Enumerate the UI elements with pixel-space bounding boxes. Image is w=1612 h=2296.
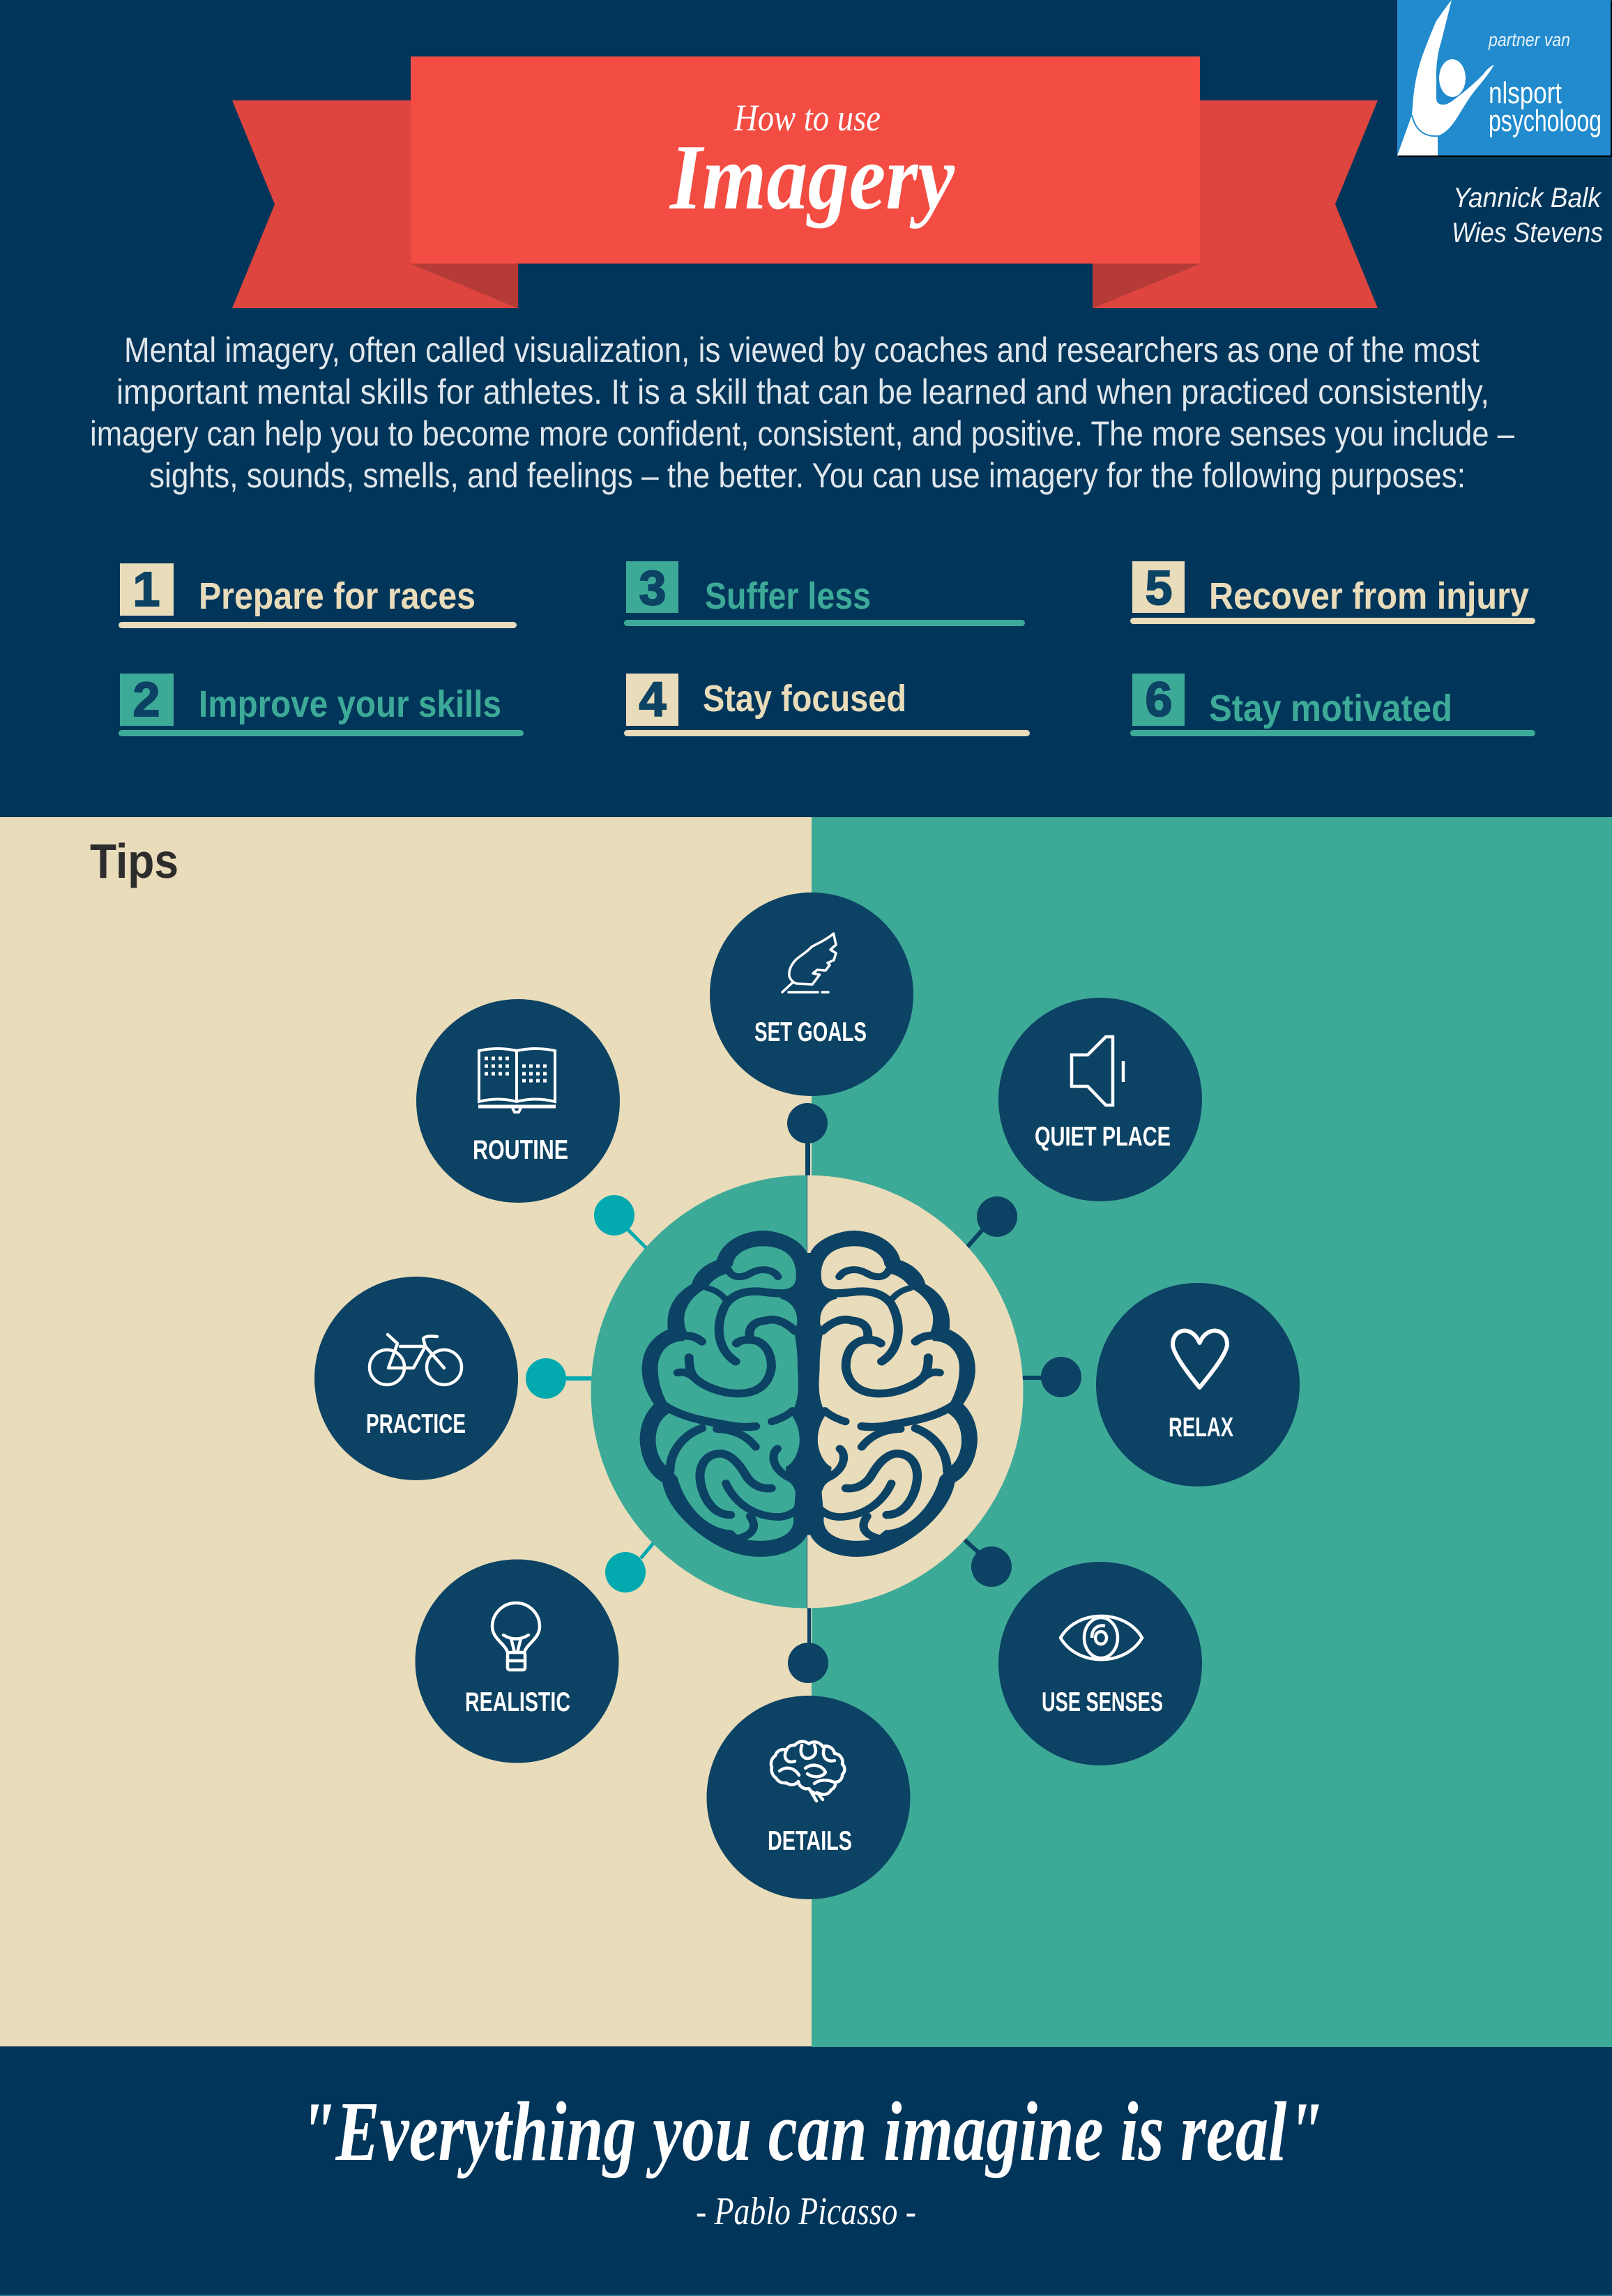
connector: relax (1021, 1357, 1081, 1397)
item 2: 2 (133, 672, 160, 727)
connector: details (788, 1606, 828, 1683)
purposes list (119, 561, 1535, 736)
item 2: Improve your skills (199, 683, 501, 725)
tips panel background right (812, 817, 1612, 2047)
tip: realistic (416, 1559, 619, 1763)
logo word nlsport: nlsport (1489, 76, 1562, 110)
subtitle: How to use (733, 97, 881, 139)
intro paragraph: important mental skills for athletes. It is a skill that can be learned and when practiced consistently, (116, 372, 1489, 411)
item 1: Prepare for races (199, 575, 476, 617)
logo: nlsport psycholoog (1397, 0, 1612, 157)
tip: quiet place (998, 998, 1202, 1201)
logo figure (1397, 0, 1494, 155)
item 5: Recover from injury (1209, 575, 1529, 617)
connector: set goals (787, 1103, 828, 1177)
icon: feather quill (782, 934, 836, 992)
item 6: Stay motivated (1209, 687, 1452, 729)
icon: bicycle (370, 1335, 462, 1385)
icon: open book (478, 1049, 556, 1112)
ribbon right tail (1093, 100, 1378, 308)
connectors and dots (526, 1103, 1081, 1683)
logo caption: partner van (1488, 29, 1570, 50)
item 1 (119, 562, 517, 628)
brain left hemisphere (640, 1231, 809, 1557)
icon: heart (1173, 1331, 1227, 1388)
tip: routine (416, 999, 620, 1203)
label: PRACTICE (366, 1409, 466, 1439)
icon: light bulb (492, 1603, 540, 1670)
logo figure contour (1412, 115, 1438, 136)
item 3: Suffer less (705, 575, 871, 617)
connector: realistic (605, 1542, 655, 1592)
tips panel background left (0, 817, 812, 2046)
label: REALISTIC (465, 1687, 570, 1717)
ribbon left fold (411, 264, 518, 308)
label: QUIET PLACE (1035, 1122, 1171, 1152)
circle right half (807, 1176, 1024, 1608)
tip: use senses (998, 1562, 1202, 1765)
tip: practice (314, 1277, 518, 1480)
item 4: 4 (639, 672, 667, 727)
circle left half (591, 1176, 807, 1608)
brain (640, 1231, 978, 1557)
icon: small brain (771, 1742, 844, 1801)
item 3: 3 (639, 561, 666, 615)
label: ROUTINE (473, 1135, 568, 1165)
connector: routine (594, 1195, 647, 1249)
tip: relax (1096, 1283, 1300, 1487)
tips heading: Tips (90, 834, 178, 888)
label: DETAILS (768, 1826, 852, 1856)
item 2 (119, 672, 524, 736)
label: USE SENSES (1042, 1687, 1163, 1717)
tip: set goals (710, 892, 913, 1096)
ribbon right fold (1093, 264, 1200, 308)
logo shadow (1399, 1, 1612, 157)
item 5 (1130, 561, 1535, 624)
connector: quiet place (966, 1196, 1017, 1248)
intro paragraph (90, 330, 1514, 495)
item 1: 1 (133, 562, 160, 616)
ribbon main panel (411, 56, 1200, 264)
intro paragraph: sights, sounds, smells, and feelings – the better. You can use imagery for the following purposes: (149, 456, 1466, 495)
connector: use senses (964, 1539, 1012, 1587)
quote attribution: - Pablo Picasso - (696, 2190, 916, 2233)
item 6 (1130, 672, 1535, 736)
central circle (591, 1175, 1024, 1609)
title: Imagery (669, 126, 955, 229)
brain right hemisphere (808, 1231, 978, 1557)
item 3 (624, 561, 1025, 626)
item 4: Stay focused (703, 678, 906, 720)
authors (1452, 183, 1603, 248)
item 5: 5 (1146, 561, 1172, 615)
author Yannick Balk: Yannick Balk (1453, 183, 1602, 213)
tip: details (707, 1696, 911, 1899)
logo head (1439, 59, 1466, 97)
ribbon left tail (232, 100, 518, 308)
quote: "Everything you can imagine is real" (299, 2085, 1323, 2179)
connector: practice (526, 1358, 593, 1399)
icon: speaker (1072, 1037, 1123, 1105)
label: RELAX (1169, 1413, 1233, 1443)
icon: eye (1060, 1616, 1142, 1659)
title ribbon (232, 56, 1378, 308)
label: SET GOALS (754, 1017, 867, 1047)
logo panel (1397, 0, 1611, 155)
item 6: 6 (1146, 672, 1172, 727)
item 4 (624, 672, 1030, 736)
